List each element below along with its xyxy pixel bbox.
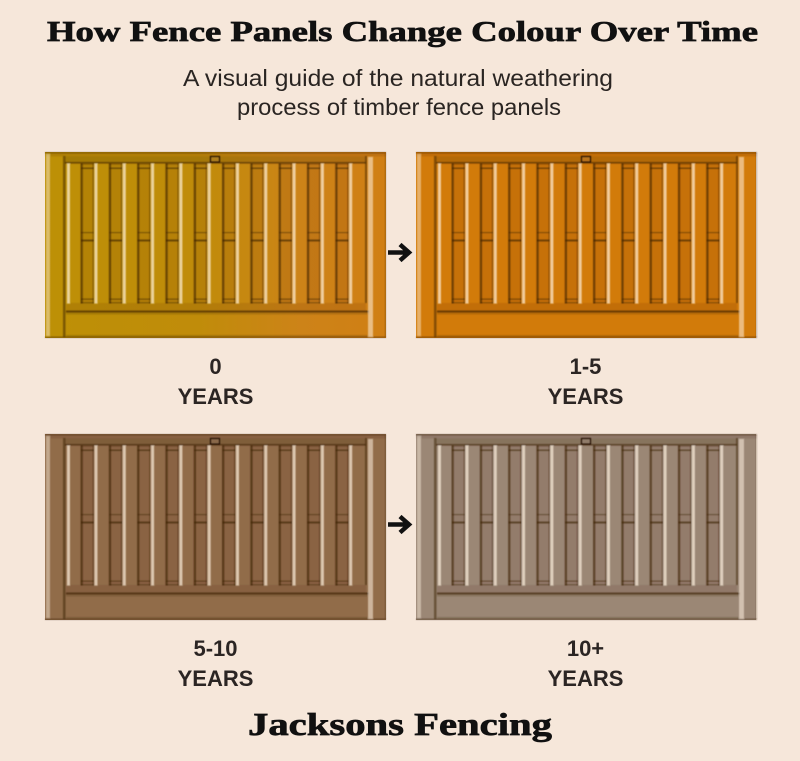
- arrow: 0 to 1-5 years: [388, 244, 409, 260]
- subtitle: process of timber fence panels: [237, 94, 561, 120]
- panel: 0 years fence: [45, 152, 386, 338]
- label: 1-5 years: 1-5: [570, 354, 601, 379]
- label: 0 years: 0: [209, 354, 222, 379]
- label: 0 years: YEARS: [178, 384, 253, 409]
- subtitle: [183, 65, 613, 120]
- panel: 10+ years fence: [416, 434, 757, 620]
- label: 1-5 years: [548, 354, 623, 409]
- label: 5-10 years: YEARS: [178, 666, 253, 691]
- label: 10+ years: [548, 636, 623, 691]
- panel: 1-5 years fence: [416, 152, 757, 338]
- subtitle: A visual guide of the natural weathering: [183, 65, 613, 91]
- panel: 5-10 years fence: [45, 434, 386, 620]
- label: 5-10 years: [178, 636, 253, 691]
- label: 5-10 years: 5-10: [193, 636, 238, 661]
- title: How Fence Panels Change Colour Over Time: [47, 16, 758, 48]
- label: 0 years: [178, 354, 253, 409]
- brand name: Jacksons Fencing: [248, 706, 552, 742]
- label: 10+ years: YEARS: [548, 666, 623, 691]
- label: 1-5 years: YEARS: [548, 384, 623, 409]
- label: 10+ years: 10+: [567, 636, 604, 661]
- arrow: 5-10 to 10+ years: [388, 516, 409, 532]
